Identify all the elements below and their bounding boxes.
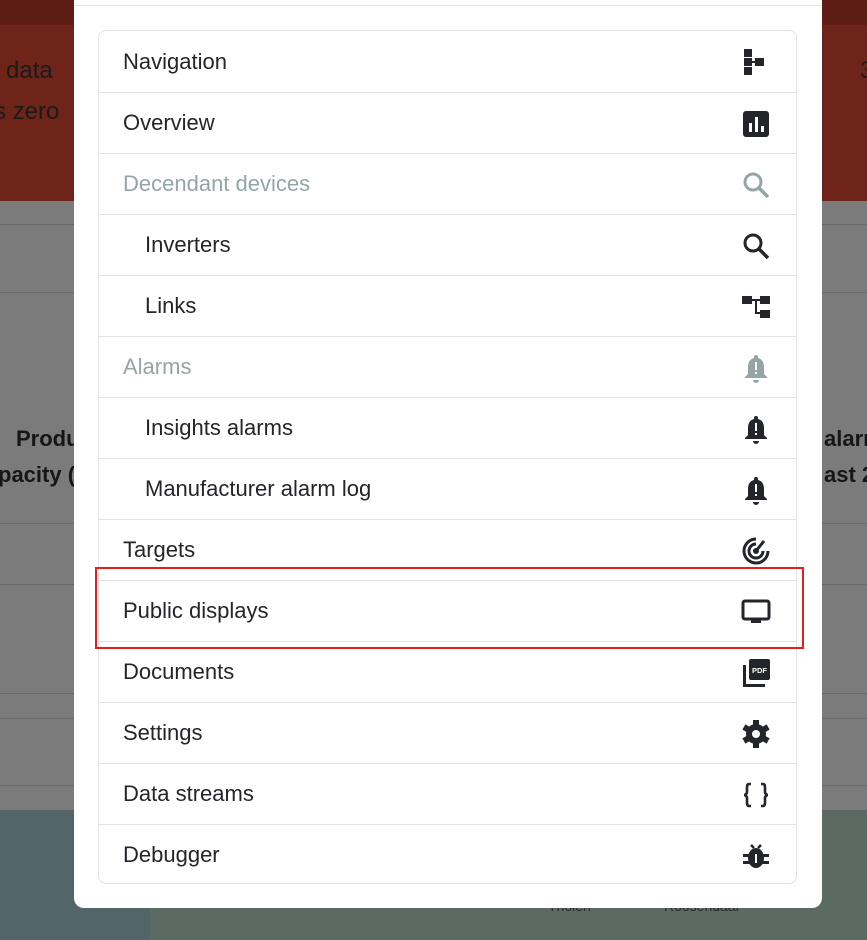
item: Navigation — [123, 48, 764, 75]
highlight box: Public displays — [95, 567, 804, 649]
item: Inverters — [99, 214, 798, 275]
item: Overview — [99, 92, 798, 153]
table headers: Produ — [16, 426, 80, 451]
item: Decendant devices: Decendant devices — [123, 171, 310, 196]
red alert banner — [0, 25, 867, 201]
item: Decendant devices — [99, 153, 798, 214]
item: Alarms: Alarms — [123, 354, 191, 379]
item: Manufacturer alarm log: Manufacturer alarm log — [145, 476, 371, 501]
item: Documents: Documents — [123, 659, 234, 684]
map: Roosendaal — [664, 898, 739, 914]
item: Documents — [99, 641, 798, 702]
item: Overview: Overview — [123, 110, 215, 135]
item: Links: Links — [145, 293, 196, 318]
item: Public displays — [99, 580, 798, 641]
map: Tholen — [548, 898, 591, 914]
item: Settings: Settings — [123, 720, 202, 745]
item: Debugger: Debugger — [123, 842, 220, 867]
item: Public displays: Public displays — [123, 598, 269, 623]
item: Data streams — [99, 763, 798, 824]
item: Debugger — [99, 824, 798, 885]
item: Alarms — [99, 336, 798, 397]
menu list — [98, 30, 797, 884]
item: Inverters: Inverters — [145, 232, 231, 257]
item: Links — [99, 275, 798, 336]
item: Manufacturer alarm log — [99, 458, 798, 519]
background page: pacity ( — [0, 462, 75, 487]
item: Documents: PDF — [752, 666, 767, 675]
item: Data streams: Data streams — [123, 781, 254, 806]
item: Insights alarms — [99, 397, 798, 458]
item: Insights alarms: Insights alarms — [145, 415, 293, 440]
map — [0, 810, 867, 940]
item: Targets: Targets — [123, 537, 195, 562]
item: Navigation: Navigation — [123, 48, 227, 74]
item: Targets — [99, 519, 798, 580]
item: Settings — [99, 702, 798, 763]
